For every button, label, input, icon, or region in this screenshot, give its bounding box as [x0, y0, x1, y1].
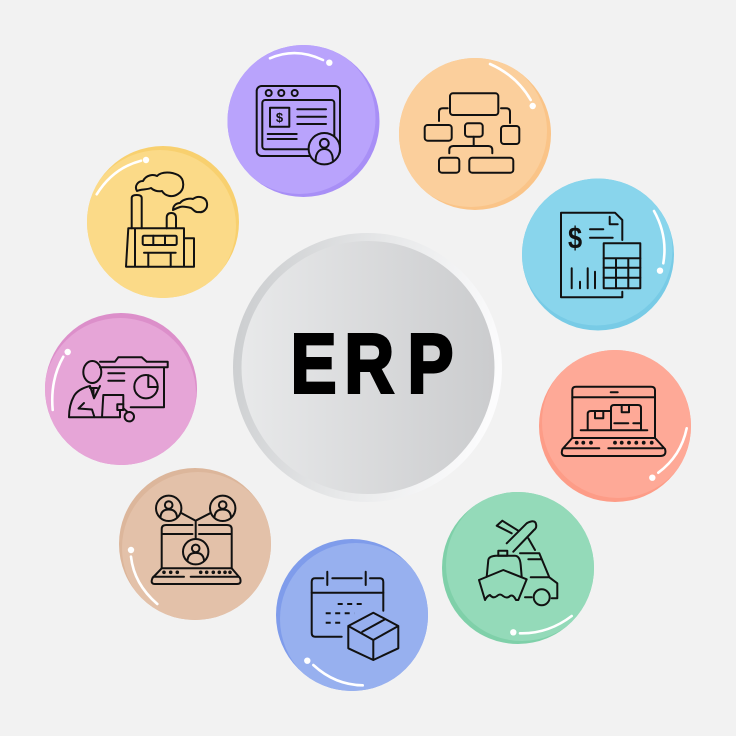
icon: laptop with connected users: [152, 496, 241, 584]
panel: central ERP disc: [233, 233, 502, 502]
highlight: [649, 428, 687, 481]
icon: presenter with pie chart board: [69, 357, 168, 421]
panel: purple bubble, billing: [224, 42, 380, 197]
icon: calendar with box: [312, 572, 398, 660]
highlight: [128, 547, 157, 604]
highlight: [490, 64, 536, 109]
panel: pink bubble, presentation: [44, 313, 197, 470]
icon: financial document with table: [561, 213, 640, 297]
highlight: [654, 211, 664, 274]
highlight: [270, 53, 332, 66]
panel: periwinkle bubble, delivery scheduling: [276, 539, 432, 695]
icon: plane, ship and truck: [479, 521, 557, 605]
panel: tan bubble, human resources: [119, 468, 274, 624]
panel: blue bubble, finance: [520, 174, 674, 330]
icon: flow chart: [425, 93, 519, 173]
icon: laptop with boxes: [562, 387, 665, 456]
panel: green bubble, logistics: [442, 489, 598, 644]
highlight: [52, 349, 71, 410]
icon: browser invoice with user: [257, 86, 340, 164]
icon: factory with smoke: [126, 172, 207, 267]
panel: salmon bubble, online inventory: [539, 346, 694, 502]
title: ERP: ERP: [291, 317, 453, 411]
highlight: [510, 616, 572, 636]
panel: orange bubble, organization chart: [395, 55, 551, 210]
highlight: [304, 658, 363, 685]
highlight: [97, 157, 149, 194]
icon: financial document with table: $: [568, 221, 582, 256]
panel: yellow bubble, manufacturing: [84, 146, 239, 302]
icon: browser invoice with user: $: [276, 110, 284, 125]
